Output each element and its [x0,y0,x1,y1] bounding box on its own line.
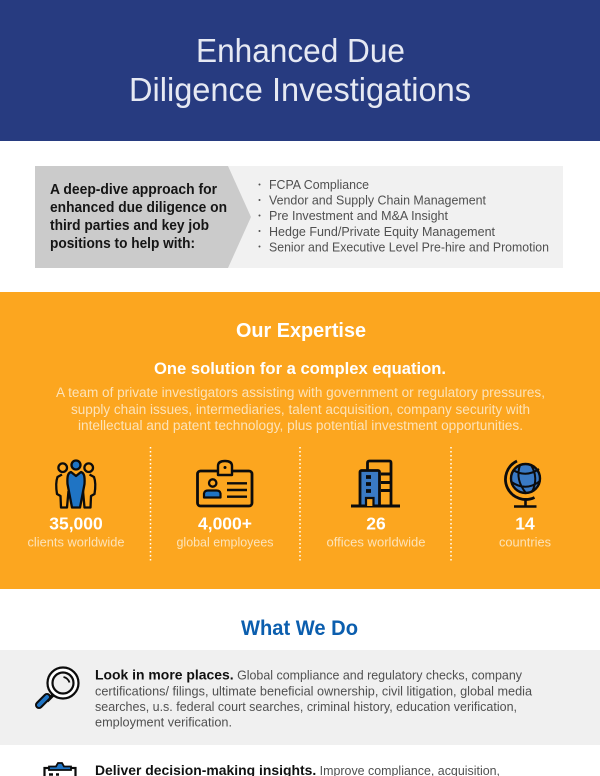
icon: clipboard [44,763,76,776]
look in more places text [95,666,532,730]
panel: our expertise [0,292,600,589]
stat: offices: offices worldwide [326,536,426,550]
icon: id card [198,461,252,506]
stat: offices [326,514,426,550]
icon: people [56,460,95,508]
stat: countries: 14 [515,514,535,534]
intro text [50,182,227,252]
bullet list: Hedge Fund/Private Equity Management [269,225,496,239]
intro text: enhanced due diligence on [50,200,227,216]
look in more places text: employment verification. [95,716,232,730]
bullet list: Senior and Executive Level Pre-hire and Promotion [269,240,549,254]
heading: what we do: What We Do [241,617,358,640]
look in more places text: certifications/ filings, ultimate beneficial ownership, civil litigation, global media [95,684,532,698]
title: Diligence Investigations [129,71,471,108]
title: Enhanced Due [196,32,405,69]
intro text: A deep-dive approach for [50,182,217,198]
panel: look in more places [0,650,600,745]
stat: clients: clients worldwide [28,536,125,550]
panel: deep-dive approach [35,166,563,268]
intro text: third parties and key job [50,218,209,234]
look in more places text: searches, u.s. federal court searches, criminal history, education verification, [95,700,517,714]
stat: employees: 4,000+ [198,514,252,534]
bullet list: FCPA Compliance [269,178,369,192]
intro text: positions to help with: [50,236,195,252]
expertise description [56,385,545,433]
stat: offices: 26 [366,514,386,534]
stat: countries: countries [499,536,551,550]
icon: globe [506,461,540,506]
expertise description: A team of private investigators assisting with government or regulatory pressures, [56,385,545,400]
title [129,32,471,108]
icon: magnifying glass [39,668,78,705]
stat: countries [499,514,551,550]
bullet list [258,178,549,254]
bullet list: Pre Investment and M&A Insight [269,209,449,223]
stat: clients [28,514,125,550]
expertise heading: Our Expertise [236,320,366,342]
stat: employees: global employees [176,536,274,550]
expertise subheading: One solution for a complex equation. [154,359,446,378]
expertise description: intellectual and patent technology, plus potential investment opportunities. [78,418,523,433]
look in more places text: Look in more places. Global compliance and regulatory checks, company [95,666,523,682]
expertise description: supply chain issues, intermediaries, talent acquisition, company security with [71,402,530,417]
stat: employees [176,514,274,550]
bullet list: Vendor and Supply Chain Management [269,194,487,208]
icon: office building [351,461,400,506]
header banner [0,0,600,141]
stat: clients: 35,000 [49,514,103,534]
